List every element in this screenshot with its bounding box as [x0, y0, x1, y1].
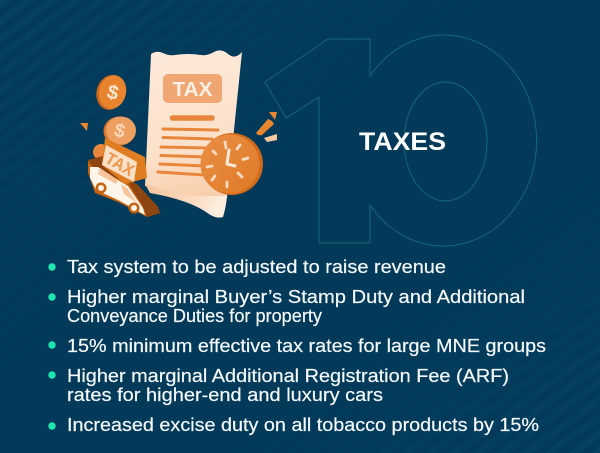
receipt lines [158, 118, 218, 175]
illustration: tax receipt, coins, taxi and clock [80, 50, 277, 218]
icon: coin behind taxi [93, 144, 109, 160]
label: TAX stamp [163, 74, 222, 103]
label: TAX stamp: TAX [172, 78, 213, 101]
bullet 1: Tax system to be adjusted to raise revenue [67, 256, 446, 277]
bullet 2: Conveyance Duties for property [67, 305, 323, 326]
icon: sparks right [256, 112, 277, 142]
icon: clock [200, 133, 263, 195]
outlined number 10 [265, 35, 537, 246]
heading: TAXES [359, 128, 446, 156]
bullet 4: rates for higher-end and luxury cars [67, 384, 383, 405]
icon: coin top [93, 72, 130, 113]
bullet 3: 15% minimum effective tax rates for large MNE groups [67, 335, 546, 356]
bullet 2: Higher marginal Buyer’s Stamp Duty and Additional [67, 286, 525, 307]
bullet list [48, 256, 546, 435]
bullet 2 [48, 286, 525, 326]
bullet 4: Higher marginal Additional Registration Fee (ARF) [67, 365, 509, 386]
icon: coin middle: $ [112, 120, 128, 143]
icon: taxi with TAX sign [88, 138, 160, 217]
icon: coin middle [104, 116, 136, 146]
bullet 4 [48, 365, 509, 405]
icon: taxi with TAX sign: TAX [102, 149, 138, 180]
icon: receipt [145, 50, 242, 218]
icon: coin top: $ [105, 81, 121, 105]
icon: small triangle left [80, 123, 88, 131]
bullet 5: Increased excise duty on all tobacco products by 15% [67, 414, 539, 435]
